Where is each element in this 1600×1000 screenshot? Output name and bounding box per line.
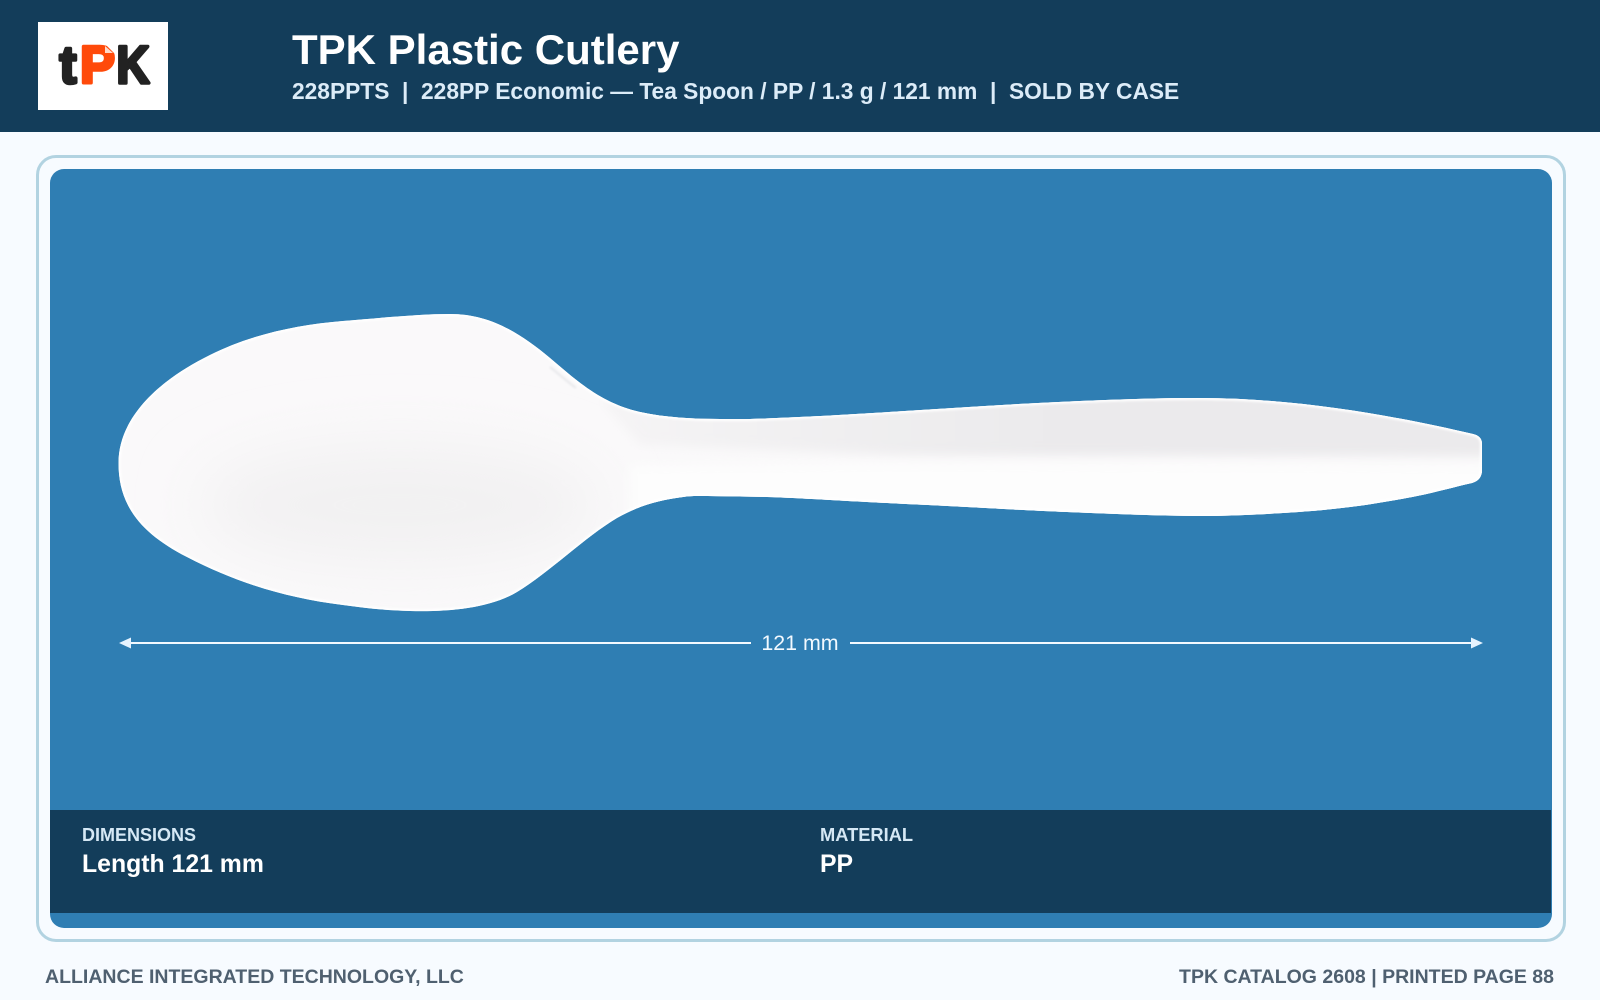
spoon [118,314,1500,611]
footer left: company: ALLIANCE INTEGRATED TECHNOLOGY, LLC [45,966,464,988]
subtitle: 228PPTS | 228PP Economic — Tea Spoon / PP / 1.3 g / 121 mm | SOLD BY CASE [292,78,1179,104]
logo: tPK [38,22,168,110]
logo: tPK: t [60,36,76,95]
material value: PP [820,850,853,878]
logo: tPK: K [116,36,150,95]
header band [0,0,1600,132]
spec bar [50,810,1551,913]
spoon and dimension graphic [118,314,1483,650]
dimensions value: Length 121 mm [82,850,264,878]
panel: product card [36,155,1566,942]
title: TPK Plastic Cutlery [292,26,679,72]
spec: material [820,824,913,878]
dimension arrow: 121 mm [119,631,1483,655]
material label: MATERIAL [820,824,913,845]
footer right: catalog page: TPK CATALOG 2608 | PRINTED PAGE 88 [1179,966,1554,988]
dimensions label: DIMENSIONS [82,825,196,845]
dimension label: 121 mm [761,631,839,655]
spec: dimensions [82,825,264,878]
logo: tPK: P [80,36,115,95]
panel: blue product stage [50,169,1552,928]
